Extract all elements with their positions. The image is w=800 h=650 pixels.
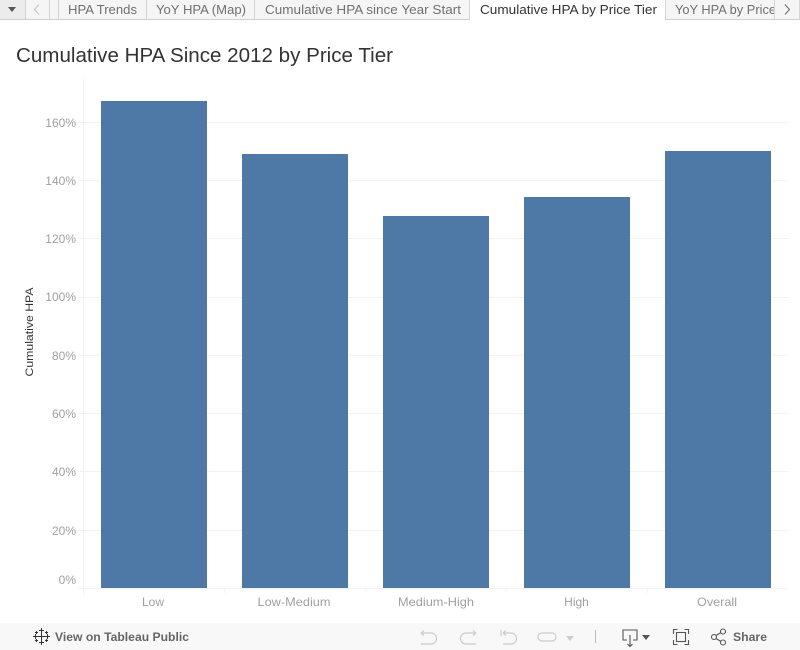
icon: refresh bbox=[538, 633, 556, 641]
tab: YoY HPA (Map): YoY HPA (Map) bbox=[156, 2, 246, 17]
icon: revert bbox=[501, 630, 516, 644]
icon: fullscreen bbox=[674, 630, 688, 644]
x axis labels: Medium-High bbox=[398, 595, 474, 609]
icon: Tableau logo bbox=[33, 628, 50, 645]
icon: redo bbox=[460, 630, 476, 644]
y axis labels: 0% bbox=[59, 573, 76, 587]
bar: Low bbox=[101, 101, 207, 588]
y axis labels: 160% bbox=[45, 116, 76, 130]
icon: refresh dropdown bbox=[566, 636, 574, 641]
x axis labels: Low-Medium bbox=[258, 595, 330, 609]
icon: undo bbox=[421, 630, 437, 644]
bar: Medium-High bbox=[383, 216, 489, 588]
y axis labels: 60% bbox=[52, 407, 76, 421]
tab: Cumulative HPA since Year Start: Cumulative HPA since Year Start bbox=[265, 2, 461, 17]
link: View on Tableau Public: View on Tableau Public bbox=[55, 630, 189, 644]
icon: tab menu arrow bbox=[8, 7, 16, 12]
tab: active Cumulative HPA by Price Tier bbox=[470, 0, 666, 20]
y axis labels: 120% bbox=[45, 232, 76, 246]
y axis labels: 20% bbox=[52, 524, 76, 538]
x axis labels: High bbox=[564, 595, 589, 609]
x axis labels: Overall bbox=[697, 595, 737, 609]
y axis labels: 100% bbox=[45, 290, 76, 304]
y axis title: Cumulative HPA bbox=[24, 287, 36, 376]
tab bar: Cumulative HPA by Price Tier bbox=[480, 2, 658, 17]
tab: YoY HPA by Price (clipped): YoY HPA by Price bbox=[675, 2, 776, 17]
bar: Overall bbox=[665, 151, 771, 588]
y axis labels: 80% bbox=[52, 349, 76, 363]
y axis labels: 140% bbox=[45, 174, 76, 188]
y axis labels bbox=[45, 116, 76, 587]
icon: previous tab arrow bbox=[34, 4, 39, 14]
tab bar bbox=[0, 0, 800, 20]
tab: HPA Trends: HPA Trends bbox=[68, 2, 138, 17]
title: Cumulative HPA Since 2012 by Price Tier bbox=[16, 45, 393, 67]
x axis labels bbox=[142, 595, 737, 609]
y axis labels: 40% bbox=[52, 465, 76, 479]
icon: share bbox=[712, 629, 726, 645]
bar: High bbox=[524, 197, 630, 588]
icon: next tab arrow bbox=[785, 4, 790, 14]
bar chart bbox=[101, 101, 771, 588]
chart frame and gridlines bbox=[78, 78, 788, 595]
bar: Low-Medium bbox=[242, 154, 348, 588]
button: Share: Share bbox=[733, 630, 767, 644]
icon: download bbox=[623, 630, 650, 646]
x axis labels: Low bbox=[142, 595, 164, 609]
toolbar bbox=[0, 623, 800, 650]
